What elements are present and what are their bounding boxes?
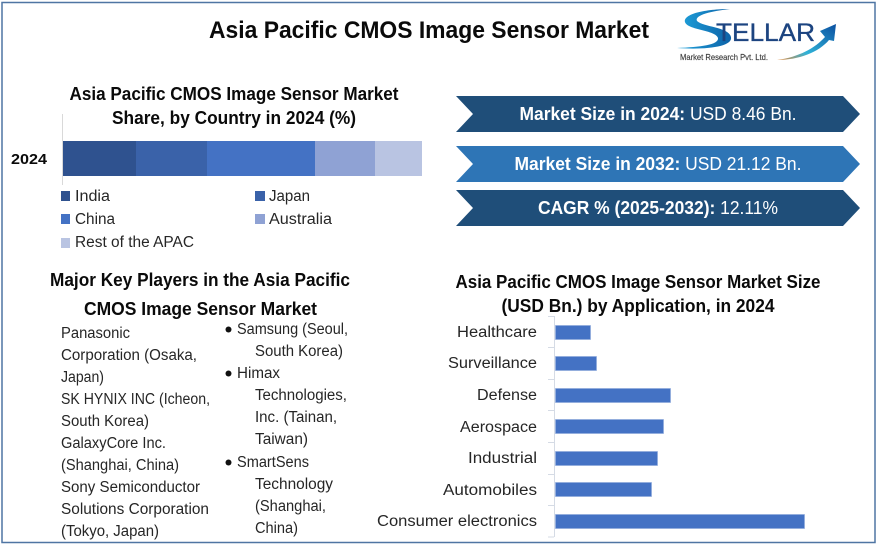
- legend: China: [75, 211, 115, 228]
- category labels: Healthcare: [457, 324, 537, 341]
- players list right column: China): [255, 520, 298, 537]
- players list right column: Technologies,: [255, 387, 347, 404]
- legend: India: [75, 188, 110, 205]
- players list right column: South Korea): [255, 343, 343, 360]
- players list right column: Inc. (Tainan,: [255, 409, 337, 426]
- arrow banner: market size 2024: [456, 96, 860, 132]
- icon: rising arrow: [777, 24, 836, 60]
- arrow banner: CAGR: CAGR % (2025-2032): 12.11%: [538, 198, 778, 218]
- players list left column: SK HYNIX INC (Icheon,: [61, 391, 210, 408]
- logo tagline: Market Research Pvt. Ltd.: [680, 52, 768, 62]
- logo wordmark: TELLAR: [716, 19, 815, 47]
- players heading line 2: CMOS Image Sensor Market: [84, 299, 317, 319]
- players list left column: Panasonic: [61, 325, 130, 342]
- arrow banner: market size 2024: Market Size in 2024: USD 8.46 Bn.: [520, 104, 796, 124]
- category labels: Aerospace: [460, 419, 537, 436]
- arrow banner: market size 2032: [456, 146, 860, 182]
- bar chart heading line 2: (USD Bn.) by Application, in 2024: [502, 296, 774, 316]
- players list left column: [61, 325, 210, 540]
- players list right column: SmartSens: [237, 454, 309, 471]
- players list left column: South Korea): [61, 413, 149, 430]
- stacked bar panel: share by country: [11, 84, 422, 251]
- arrow banner: market size 2032: Market Size in 2032: USD 21.12 Bn.: [514, 154, 802, 174]
- players list right column: Technology: [255, 476, 333, 493]
- players list right column: (Shanghai,: [255, 498, 326, 515]
- category labels: [377, 324, 537, 530]
- title: Asia Pacific CMOS Image Sensor Market: [209, 17, 649, 44]
- players list left column: Japan): [61, 369, 104, 386]
- players list right column: Himax: [237, 365, 280, 382]
- bars: [556, 326, 804, 528]
- icon: S swoosh: [677, 9, 731, 49]
- legend: [61, 188, 332, 251]
- year axis label: 2024: [11, 152, 47, 168]
- players list left column: Solutions Corporation: [61, 501, 209, 518]
- category labels: Defense: [477, 387, 537, 404]
- legend: Rest of the APAC: [75, 234, 194, 251]
- players list left column: Corporation (Osaka,: [61, 347, 197, 364]
- legend: Japan: [269, 188, 310, 205]
- players list right column: Samsung (Seoul,: [237, 321, 348, 338]
- players list right column: [226, 321, 348, 537]
- category labels: Consumer electronics: [377, 513, 537, 530]
- bar chart panel: by application: [377, 272, 820, 537]
- players heading: Major Key Players in the Asia Pacific: [50, 270, 350, 290]
- players list left column: (Shanghai, China): [61, 457, 179, 474]
- players list left column: Sony Semiconductor: [61, 479, 200, 496]
- category labels: Industrial: [468, 450, 537, 467]
- bar chart heading: Asia Pacific CMOS Image Sensor Market Size: [456, 272, 820, 292]
- arrow banner: CAGR: [456, 190, 860, 226]
- players list left column: GalaxyCore Inc.: [61, 435, 166, 452]
- category labels: Automobiles: [443, 482, 537, 499]
- panel: major key players: [50, 270, 350, 540]
- legend: Australia: [269, 211, 332, 228]
- stacked chart heading: Asia Pacific CMOS Image Sensor Market: [70, 84, 398, 104]
- category labels: Surveillance: [448, 355, 537, 372]
- logo: Stellar Market Research: [677, 9, 836, 62]
- stacked chart heading line 2: Share, by Country in 2024 (%): [112, 108, 356, 128]
- stacked bar: [63, 141, 422, 176]
- players list right column: Taiwan): [255, 431, 308, 448]
- players list left column: (Tokyo, Japan): [61, 523, 159, 540]
